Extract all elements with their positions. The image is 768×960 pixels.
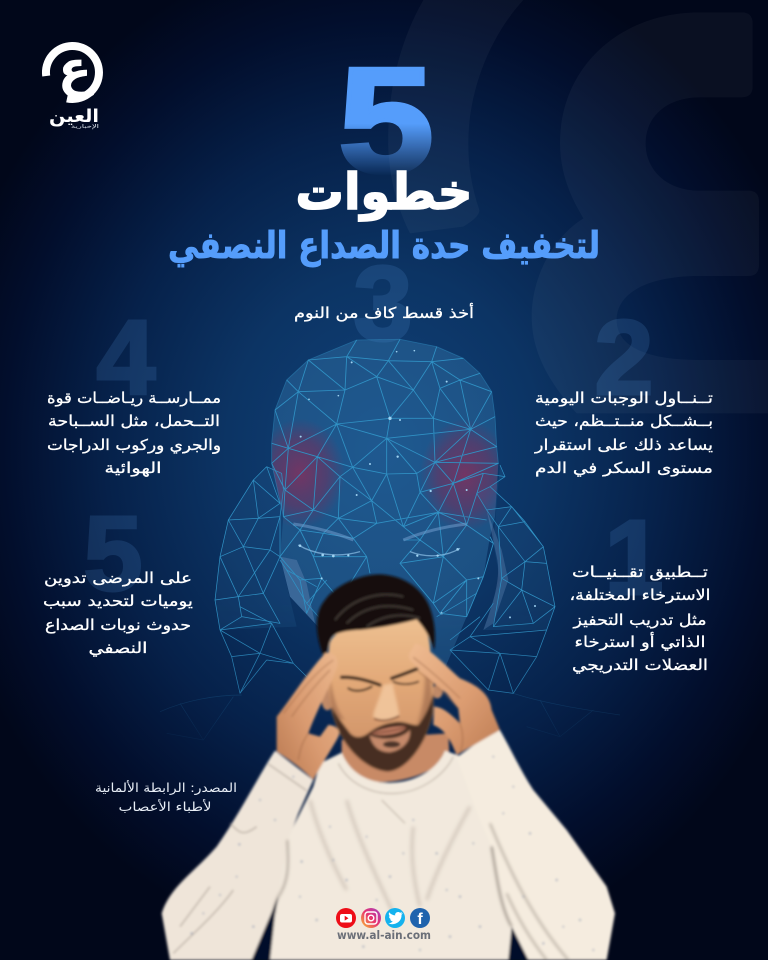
logo bbox=[46, 40, 99, 130]
left sleeve bbox=[162, 751, 313, 960]
head and hands bbox=[277, 574, 500, 780]
step 5 text: حدوث نوبات الصداع bbox=[45, 616, 191, 634]
right shoulder wire lines bbox=[477, 465, 555, 630]
step 5 text: النصفي bbox=[88, 639, 148, 658]
nose bbox=[373, 683, 399, 721]
step 1 text: العضلات التدريجي bbox=[572, 656, 708, 675]
title numeral 5: 5 bbox=[338, 37, 434, 204]
hair highlights bbox=[335, 595, 420, 627]
illustration: polygon mesh head bbox=[160, 339, 620, 740]
title line: steps: خطوات bbox=[296, 163, 472, 222]
beard bbox=[332, 693, 433, 771]
background numeral 2: 2 bbox=[595, 299, 653, 417]
watermark: large logo letter bbox=[388, 0, 768, 413]
faint shoulder mesh bbox=[160, 693, 620, 740]
mouth line bbox=[369, 727, 407, 733]
step 2 text: مستوى السكر في الدم bbox=[535, 459, 713, 478]
face bbox=[328, 613, 433, 771]
gap under right arm bbox=[508, 927, 528, 960]
background numeral 5: 5 bbox=[84, 495, 142, 613]
subtitle: لتخفيف حدة الصداع النصفي bbox=[168, 224, 600, 267]
lower left arm mesh bbox=[220, 607, 307, 693]
brow and eye highlights bbox=[293, 524, 467, 556]
step 2 text: تــنــاول الوجبات اليومية bbox=[535, 389, 713, 407]
step 1 text: مثل تدريب التحفيز bbox=[572, 611, 706, 629]
head fill bbox=[272, 339, 498, 680]
step 4 text: والجري وركوب الدراجات bbox=[47, 436, 221, 455]
face right shadow bbox=[417, 653, 432, 727]
step 4 text: الهوائية bbox=[104, 459, 162, 477]
website: www.al-ain.com bbox=[337, 928, 431, 942]
left sleeve folds bbox=[173, 764, 307, 953]
step 5 text: على المرضى تدوين bbox=[44, 569, 192, 587]
lower mesh: arms and shoulders bbox=[160, 560, 620, 740]
neck bbox=[342, 733, 449, 782]
soul patch bbox=[383, 741, 400, 748]
shirt and arms bbox=[162, 727, 615, 960]
facebook icon: f bbox=[417, 911, 423, 928]
source note bbox=[95, 780, 237, 814]
twitter icon bbox=[385, 908, 405, 928]
source note: المصدر: الرابطة الألمانية bbox=[95, 780, 237, 796]
logo wordmark: العين bbox=[49, 106, 99, 127]
gap under left arm bbox=[252, 897, 278, 960]
pain glow left bbox=[272, 422, 498, 528]
step 1 text: الاسترخاء المختلفة، bbox=[570, 586, 710, 604]
source note: لأطباء الأعصاب bbox=[118, 799, 212, 814]
background numeral 1: 1 bbox=[605, 499, 663, 617]
right jaw band bbox=[483, 510, 508, 630]
background numeral 4: 4 bbox=[97, 299, 156, 417]
right hand finger lines bbox=[413, 657, 463, 752]
step 5 text: يوميات لتحديد سبب bbox=[43, 592, 193, 610]
ears bbox=[321, 685, 443, 710]
left jaw band bbox=[280, 557, 315, 623]
step 3 text: أخذ قسط كاف من النوم bbox=[294, 303, 474, 322]
youtube icon bbox=[336, 908, 356, 928]
glowing nodes bbox=[299, 350, 536, 618]
shirt torso bbox=[270, 751, 513, 960]
step 1 text: تــطبيق تقــنيــات bbox=[572, 563, 708, 581]
collar line bbox=[338, 757, 453, 823]
step 2 text: بــشــكل منــتــظم، حيث bbox=[535, 412, 713, 430]
right arm seam bbox=[492, 847, 512, 927]
lips bbox=[369, 726, 407, 735]
instagram icon bbox=[361, 908, 381, 928]
right arm crease bbox=[490, 823, 568, 960]
step 2 text bbox=[534, 389, 713, 478]
step 4 text bbox=[47, 389, 221, 477]
left shoulder wire lines bbox=[215, 467, 283, 630]
left hand finger lines bbox=[283, 660, 333, 760]
left cheek shadow bbox=[330, 680, 345, 720]
lower right arm mesh bbox=[450, 603, 547, 693]
step 1 text bbox=[570, 563, 710, 675]
torso folds bbox=[310, 800, 470, 913]
step 1 text: الذاتي أو استرخاء bbox=[574, 632, 706, 652]
step 2 text: يساعد ذلك على استقرار bbox=[534, 436, 713, 454]
nose shadow bbox=[374, 716, 399, 720]
side mesh fills bbox=[215, 467, 297, 630]
step 5 text bbox=[43, 569, 193, 658]
left hand bbox=[277, 653, 339, 780]
step 4 text: التــحمل، مثل الســباحة bbox=[48, 412, 220, 430]
centre mesh behind head bbox=[280, 560, 480, 640]
logo tagline: الإخبارية bbox=[71, 124, 99, 130]
hair bbox=[317, 574, 435, 660]
right hand bbox=[409, 643, 500, 755]
social icons and website bbox=[336, 908, 431, 942]
background numeral 3: 3 bbox=[354, 245, 412, 363]
logo letter: ع bbox=[58, 40, 94, 98]
eyes and brows bbox=[342, 668, 418, 691]
man with headache bbox=[162, 574, 615, 960]
left arm seam bbox=[274, 840, 288, 913]
skin below lip bbox=[369, 729, 410, 752]
head wire lines bbox=[272, 339, 498, 617]
shirt speckles bbox=[191, 756, 594, 951]
right side mesh fill bbox=[477, 465, 555, 630]
logo ring bbox=[46, 46, 99, 99]
right sleeve bbox=[457, 727, 615, 960]
step 4 text: ممــارســة ريـاضــات قوة bbox=[47, 389, 221, 407]
